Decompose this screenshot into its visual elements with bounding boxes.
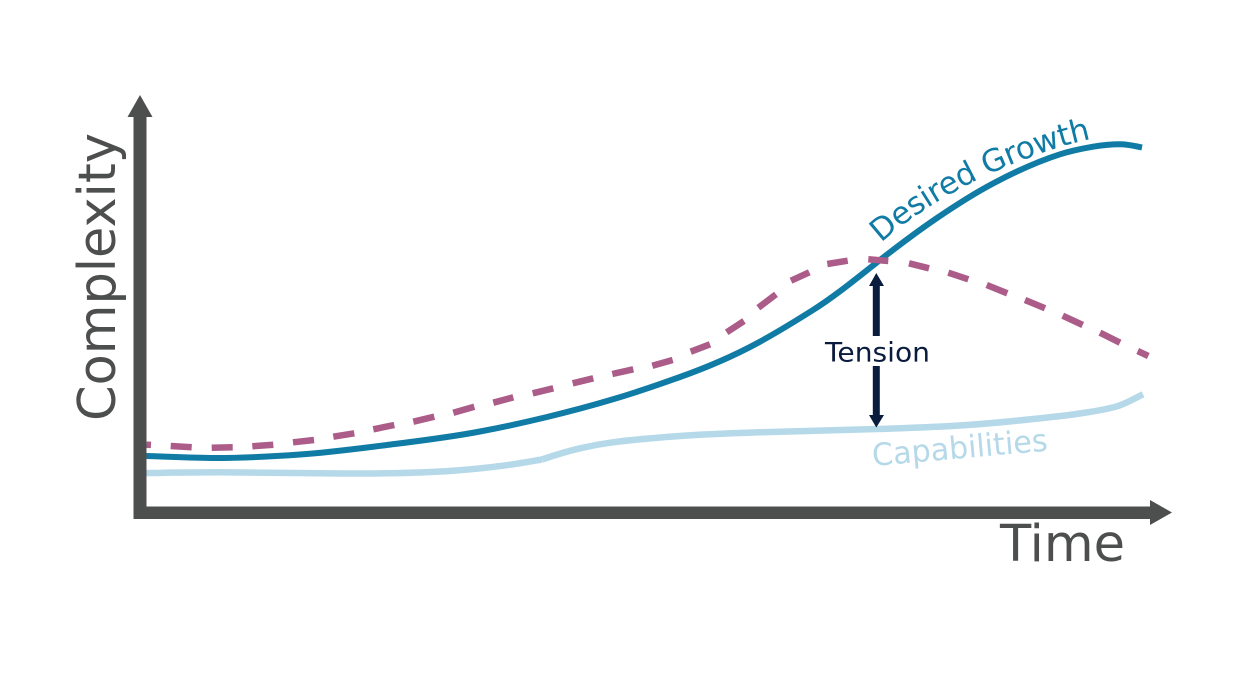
y axis arrow xyxy=(128,95,152,519)
tension label: Tension xyxy=(824,338,930,368)
x axis label: Time xyxy=(999,515,1125,574)
dashed curve xyxy=(146,259,1148,448)
tension arrow up xyxy=(869,273,884,336)
x axis arrow xyxy=(134,500,1172,525)
tension arrow down xyxy=(869,366,884,428)
capabilities label: Capabilities xyxy=(871,423,1049,474)
y axis label: Complexity xyxy=(68,133,128,421)
desired growth label: Desired Growth xyxy=(868,119,1089,241)
desired growth curve xyxy=(146,144,1142,458)
capabilities curve xyxy=(146,394,1143,474)
